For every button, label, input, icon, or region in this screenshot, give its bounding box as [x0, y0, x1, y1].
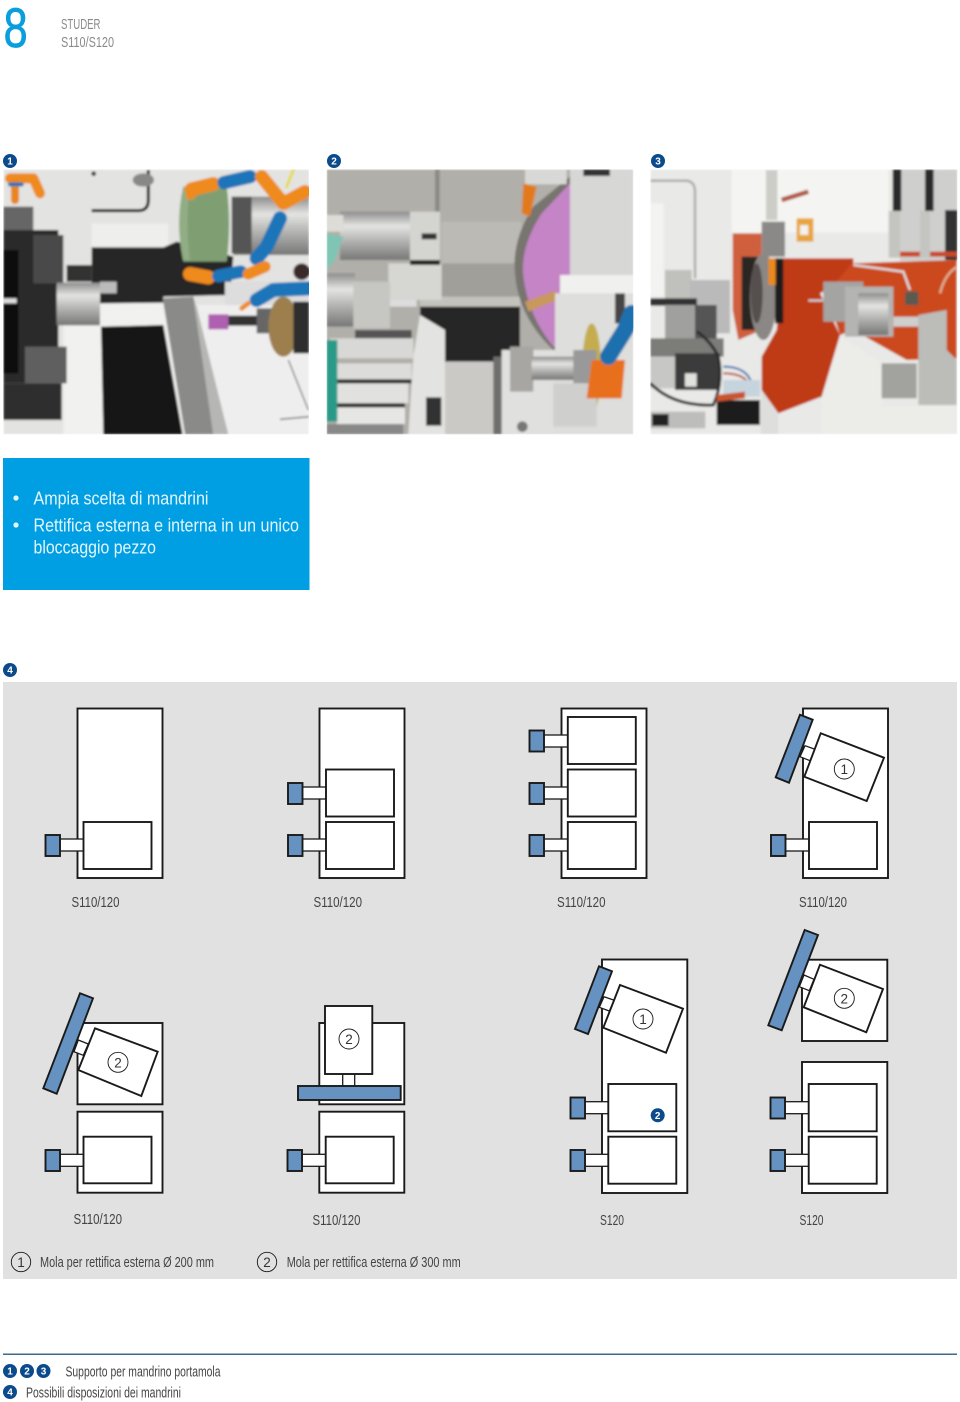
diagram: two spindles, S110/120: S110/120 — [314, 895, 362, 911]
legend: wheel 2: Mola per rettifica esterna Ø 300 mm — [287, 1255, 461, 1271]
photo 3: red machine with two spindles — [650, 169, 957, 434]
diagram: straight wheel 2 over lower spindle, S110/120: S110/120 — [312, 1213, 360, 1229]
bullet list: Rettifica esterna e interna in un unico — [34, 514, 299, 536]
wheel marker 2 — [834, 988, 854, 1008]
badge 2 inside diagram: 2 — [655, 1111, 661, 1122]
wheel marker 2: 2 — [114, 1055, 122, 1070]
wheel marker 2 — [108, 1052, 128, 1072]
caption line 2 — [3, 1385, 181, 1402]
badge 4 — [3, 663, 17, 677]
badge 1: 1 — [7, 156, 13, 168]
badge 2 — [327, 154, 341, 168]
photo 2: large grinding wheel with spindle — [327, 169, 633, 434]
panel: spindle arrangements — [3, 682, 957, 1279]
diagram: swivelled wheel 2 over lower spindle, S110/120: S110/120 — [74, 1212, 122, 1228]
caption line 1: 3 — [41, 1366, 47, 1378]
caption line 2: Possibili disposizioni dei mandrini — [26, 1386, 181, 1402]
badge 2: 2 — [331, 156, 337, 168]
header text: STUDER — [61, 17, 100, 33]
legend: wheel 1: 1 — [17, 1255, 25, 1270]
bullet list: bloccaggio pezzo — [34, 536, 156, 558]
diagram: S120 swivelled wheel 1 with two spindles — [570, 960, 687, 1229]
wheel marker 1 — [633, 1009, 653, 1029]
caption line 1: Supporto per mandrino portamola — [66, 1364, 221, 1380]
wheel marker 2: 2 — [841, 991, 848, 1006]
wheel marker 2 — [339, 1029, 359, 1049]
diagram: swivelled wheel 1 with spindle, S110/120 — [771, 708, 888, 911]
badge 1 — [3, 154, 17, 168]
badge 3: 3 — [655, 156, 661, 168]
caption line 1: 1 — [7, 1366, 13, 1378]
bullet list — [13, 488, 299, 558]
wheel marker 1: 1 — [639, 1012, 647, 1027]
diagram: three spindles, S110/120 — [530, 708, 646, 911]
diagram: two spindles, S110/120 — [288, 708, 404, 911]
photo 1: internal and external grinding wheels — [3, 169, 310, 434]
caption line 1 — [3, 1364, 221, 1380]
header text — [61, 17, 114, 51]
diagram: S120 swivelled wheel 1 with two spindles: S120 — [600, 1213, 624, 1229]
wheel marker 1 — [834, 759, 854, 779]
legend: wheel 1: Mola per rettifica esterna Ø 200 mm — [40, 1255, 214, 1271]
diagram: three spindles, S110/120: S110/120 — [557, 895, 606, 911]
badge 2 inside diagram — [651, 1108, 665, 1122]
badge 4: 4 — [7, 666, 13, 676]
caption line 1: 2 — [24, 1366, 30, 1378]
header text: S110/S120 — [61, 35, 114, 51]
bullet list: Ampia scelta di mandrini — [34, 488, 208, 508]
caption line 2: 4 — [7, 1388, 13, 1398]
legend: wheel 2: 2 — [263, 1255, 271, 1270]
legend: wheel 1 — [11, 1252, 214, 1272]
diagram: one spindle, S110/120: S110/120 — [72, 895, 120, 911]
wheel marker 1: 1 — [841, 762, 848, 777]
diagram: S120 swivelled wheel 2 with two spindles — [768, 930, 887, 1229]
diagram: straight wheel 2 over lower spindle, S110/120 — [288, 1006, 404, 1229]
diagram: S120 swivelled wheel 2 with two spindles: S120 — [800, 1213, 824, 1229]
badge 3 — [651, 154, 665, 168]
diagram: swivelled wheel 2 over lower spindle, S110/120 — [43, 993, 162, 1228]
diagram: swivelled wheel 1 with spindle, S110/120: S110/120 — [799, 895, 847, 911]
diagram: one spindle, S110/120 — [46, 708, 162, 911]
wheel marker 2: 2 — [345, 1032, 353, 1047]
legend: wheel 2 — [257, 1252, 461, 1272]
blue callout box — [3, 458, 310, 590]
